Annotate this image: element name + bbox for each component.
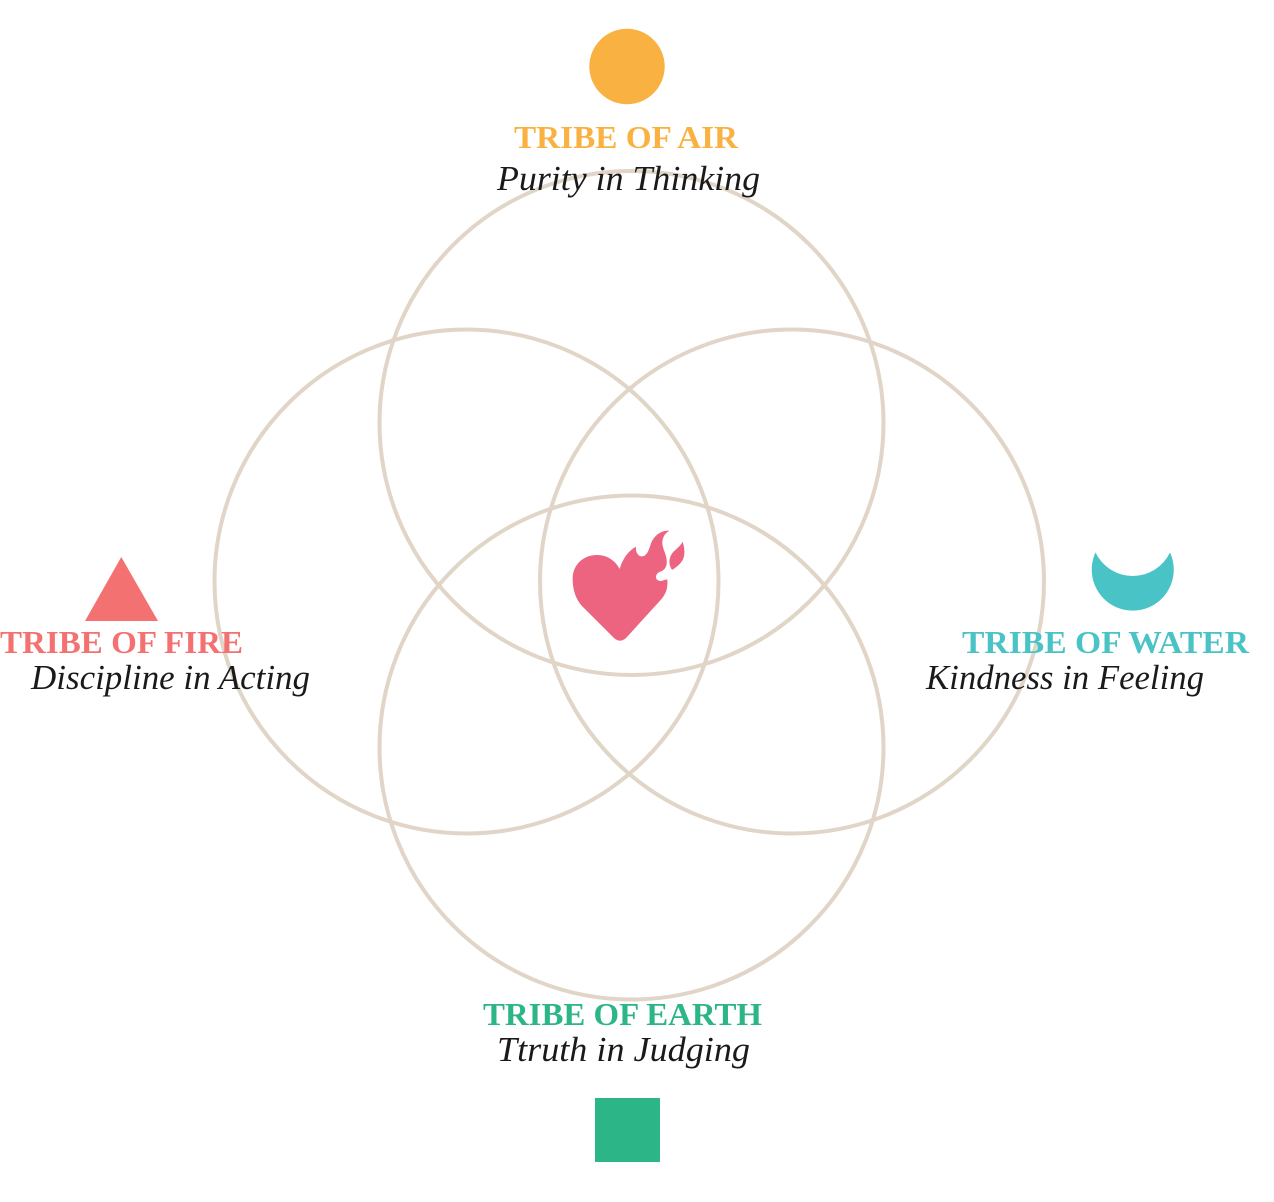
icon: air circle: [589, 29, 665, 104]
icon: flaming heart: [573, 531, 684, 641]
heading: tribe of water: TRIBE OF WATER: [962, 624, 1250, 660]
icon: fire triangle: [85, 557, 158, 621]
text: discipline in acting: Discipline in Acting: [30, 658, 310, 697]
venn diagram rings: [214, 171, 1044, 1000]
text: truth in judging: Ttruth in Judging: [497, 1030, 750, 1069]
heading: tribe of earth: TRIBE OF EARTH: [483, 996, 762, 1032]
heading: tribe of air: TRIBE OF AIR: [514, 119, 739, 155]
icon: water crescent: [1092, 552, 1174, 611]
heading: tribe of fire: TRIBE OF FIRE: [0, 624, 243, 660]
text: purity in thinking: Purity in Thinking: [496, 159, 760, 198]
icon: earth square: [595, 1098, 660, 1162]
text: kindness in feeling: Kindness in Feeling: [925, 658, 1204, 697]
